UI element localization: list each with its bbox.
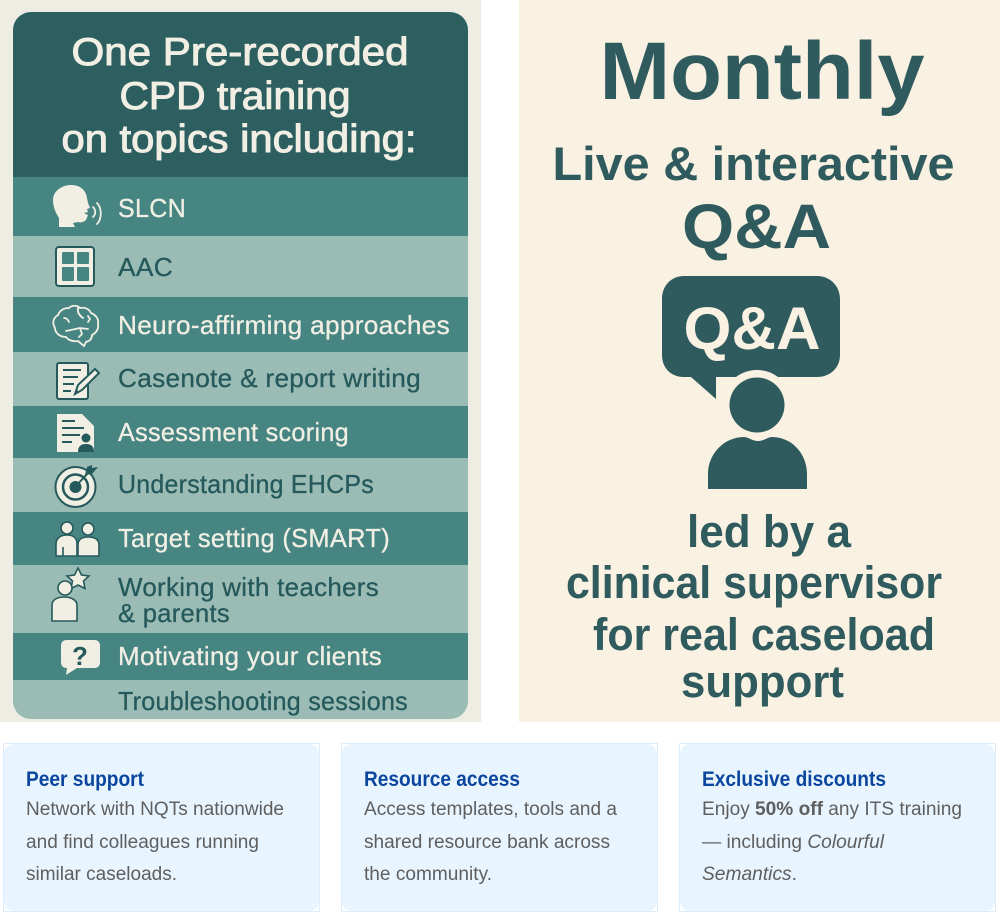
text: led by a clinical supervisor: for real caseload bbox=[593, 609, 935, 660]
topic: SLCN: SLCN bbox=[118, 193, 186, 223]
topic: Neuro-affirming approaches: Neuro-affirming approaches bbox=[118, 310, 450, 340]
card title: Resource access bbox=[364, 768, 520, 791]
icon: Q&A speech bubble and person bbox=[662, 276, 840, 489]
topic: Target setting (SMART): Target setting (SMART) bbox=[118, 523, 390, 553]
icon: brain bbox=[53, 306, 98, 346]
topic: Assessment scoring: Assessment scoring bbox=[118, 417, 349, 447]
panel heading: One Pre-recorded bbox=[72, 31, 408, 74]
icon: Q&A speech bubble and person: Q&A bbox=[684, 295, 820, 362]
card body: Enjoy 50% off any ITS training bbox=[702, 799, 962, 820]
icon: AAC grid bbox=[56, 247, 94, 286]
card body: shared resource bank across bbox=[364, 832, 610, 853]
text: led by a clinical supervisor: led by a bbox=[687, 506, 852, 557]
panel heading: on topics including: bbox=[62, 118, 417, 161]
card title: Exclusive discounts bbox=[702, 768, 886, 791]
icon: two people bbox=[56, 522, 99, 556]
icon: person with star bbox=[52, 568, 89, 621]
panel heading bbox=[62, 31, 417, 161]
card body: and find colleagues running bbox=[26, 832, 259, 853]
card body: the community. bbox=[364, 864, 492, 885]
icon: notes and pencil bbox=[57, 363, 99, 399]
topic: Casenote and report writing: Casenote & report writing bbox=[118, 363, 421, 393]
text: led by a clinical supervisor bbox=[566, 506, 942, 707]
icon: question bubble bbox=[61, 640, 100, 675]
text: led by a clinical supervisor: clinical supervisor bbox=[566, 557, 942, 608]
subheading: Live and interactive Q&A: Q&A bbox=[682, 192, 831, 262]
heading: Monthly: Monthly bbox=[600, 26, 925, 117]
card: Exclusive discounts bbox=[680, 744, 996, 912]
panel: CPD training topics bbox=[0, 0, 481, 722]
icon: question bubble: ? bbox=[72, 641, 88, 671]
card body: similar caseloads. bbox=[26, 864, 177, 885]
card body: Network with NQTs nationwide bbox=[26, 799, 284, 820]
icon: target bbox=[56, 465, 98, 507]
subheading: Live and interactive Q&A: Live & interactive bbox=[552, 137, 954, 190]
card body: — including Colourful bbox=[702, 832, 885, 853]
topic: Motivating your clients: Motivating your clients bbox=[118, 641, 382, 671]
card: Peer support bbox=[4, 744, 320, 912]
panel heading: CPD training bbox=[120, 75, 350, 118]
topic: Working with teachers and parents: Working with teachers bbox=[118, 572, 379, 602]
card body: Access templates, tools and a bbox=[364, 799, 617, 820]
card body bbox=[702, 799, 962, 885]
card body bbox=[26, 799, 284, 885]
card: Resource access bbox=[342, 744, 658, 912]
card body bbox=[364, 799, 617, 885]
topic: Working with teachers and parents bbox=[118, 572, 379, 628]
card title: Peer support bbox=[26, 768, 144, 791]
topic: Troubleshooting sessions: Troubleshooting sessions bbox=[118, 686, 408, 716]
topic: Working with teachers and parents: & parents bbox=[118, 598, 230, 628]
topic bands bbox=[13, 12, 468, 719]
topic: AAC: AAC bbox=[118, 252, 173, 282]
icon: speaking head bbox=[53, 185, 101, 227]
icon: assessment document bbox=[57, 414, 94, 452]
card body: Semantics. bbox=[702, 864, 797, 885]
text: led by a clinical supervisor: support bbox=[681, 656, 844, 707]
topic: Understanding EHCPs: Understanding EHCPs bbox=[118, 469, 374, 499]
panel: monthly Q&A bbox=[519, 0, 1000, 722]
subheading: Live and interactive Q&A bbox=[552, 137, 954, 262]
